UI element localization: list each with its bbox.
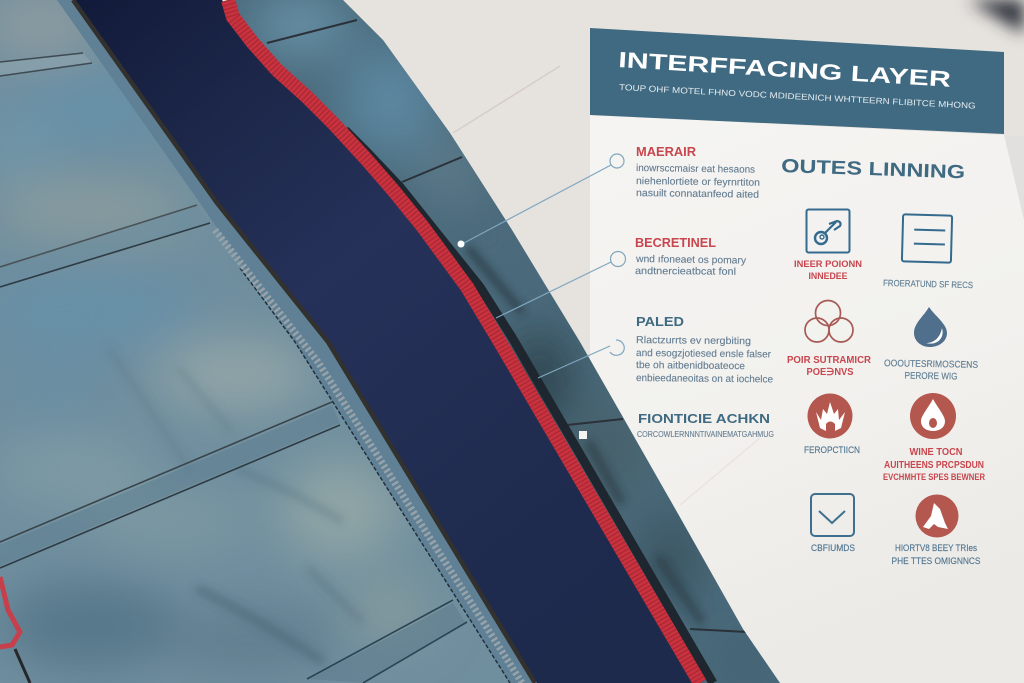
text block: paled: tbe oh aitbenidboateoce: [636, 360, 746, 372]
text block: material: niehenlortiete or feyrnrtiton: [636, 176, 760, 189]
feature: peak circle: HIORTV8 BEEY TRIes: [895, 543, 977, 554]
text block: material: nasuilt connatanfeod aited: [636, 188, 759, 201]
feature: droplet protection: [883, 393, 985, 482]
text block: secondary: andtnercieatbcat fonl: [635, 266, 736, 278]
icon: peak in circle: [916, 494, 958, 538]
feature: three circles: [787, 300, 872, 378]
text block: secondary: wnd ıfoneaet os pomary: [635, 254, 746, 267]
feature: inner lining icon: INNEDEE: [808, 271, 848, 282]
text block: fiontice achkn: FIONTICIE ACHKN: [638, 411, 770, 426]
feature: flame protection: [804, 394, 860, 456]
icon: document lines: [902, 214, 952, 263]
text block: paled: and esogzjotiesed ensle falser: [636, 348, 772, 360]
text block: paled: Rlactzurrts ev nergbiting: [636, 335, 751, 347]
jacket pull tab: [0, 577, 30, 683]
feature: peak circle: PHE TTES OMIGNNCS: [892, 556, 980, 567]
text block: material: [636, 145, 760, 201]
feature: three circles: POE∋NVS: [806, 367, 854, 378]
feature: droplet protection: EVCHMHTE SPES BEWNER: [883, 472, 985, 482]
white information panel: [590, 115, 1024, 683]
feature: water drop: OOOUTESRIMOSCENS: [884, 358, 978, 371]
icon: guitar clip in square: [806, 210, 850, 252]
feature: water drop: PERORE WIG: [904, 371, 958, 382]
section heading: outes lining: OUTES LINNING: [781, 156, 965, 183]
feature: inner lining icon: INEER POIONN: [794, 259, 862, 270]
banner subtitle: TOUP OHF MOTEL FHNO VODC MDIDEENICH WHTTEERN FLIBITCE MHONG: [619, 82, 976, 111]
feature: inner lining icon: [794, 210, 862, 282]
navy inner lining: [73, 0, 700, 683]
icon: chevron in square: [811, 494, 854, 536]
icon: droplet in circle: [910, 393, 956, 439]
callout lines and markers: [458, 154, 626, 439]
feature: flame protection: FEROPCTIICN: [804, 445, 860, 456]
feature: peak circle: [892, 494, 980, 567]
icon: water drop: [914, 307, 947, 347]
text block: paled: PALED: [636, 315, 684, 329]
feature: three circles: POIR SUTRAMICR: [787, 355, 872, 366]
red zipper piping: [228, 0, 713, 683]
text block: material: MAERAIR: [636, 145, 696, 159]
header banner: [590, 28, 1004, 134]
text block: fiontice achkn: [637, 411, 774, 439]
feature: lines icon: [883, 214, 973, 290]
text block: material: inowrsccmaisr eat hesaons: [636, 163, 755, 176]
feature: lines icon: FROERATUND SF RECS: [883, 278, 973, 290]
feature: droplet protection: AUITHEENS PRCPSDUN: [884, 460, 984, 471]
zipper tape and teeth: [57, 0, 537, 683]
feature: chevron box: [811, 494, 855, 554]
text block: paled: [636, 315, 774, 385]
banner title: INTERFFACING LAYER: [618, 47, 952, 92]
quilting seams: [0, 53, 467, 683]
text block: fiontice achkn: CORCOWLERNNNTIVAINEMATGAHMUG: [637, 429, 774, 439]
jacket right panel: [235, 0, 780, 683]
icon: flame in circle: [808, 394, 852, 438]
feature: droplet protection: WINE TOCN: [910, 447, 962, 458]
text block: secondary: BECRETINEL: [635, 236, 716, 250]
text block: secondary: [635, 236, 746, 278]
feature: water drop: [884, 307, 978, 382]
icon: three rings: [805, 300, 853, 342]
jacket left panel: [0, 0, 560, 683]
text block: paled: enbieedaneoitas on at iochelce: [636, 373, 774, 385]
feature: chevron box: CBFIUMDS: [811, 543, 855, 554]
